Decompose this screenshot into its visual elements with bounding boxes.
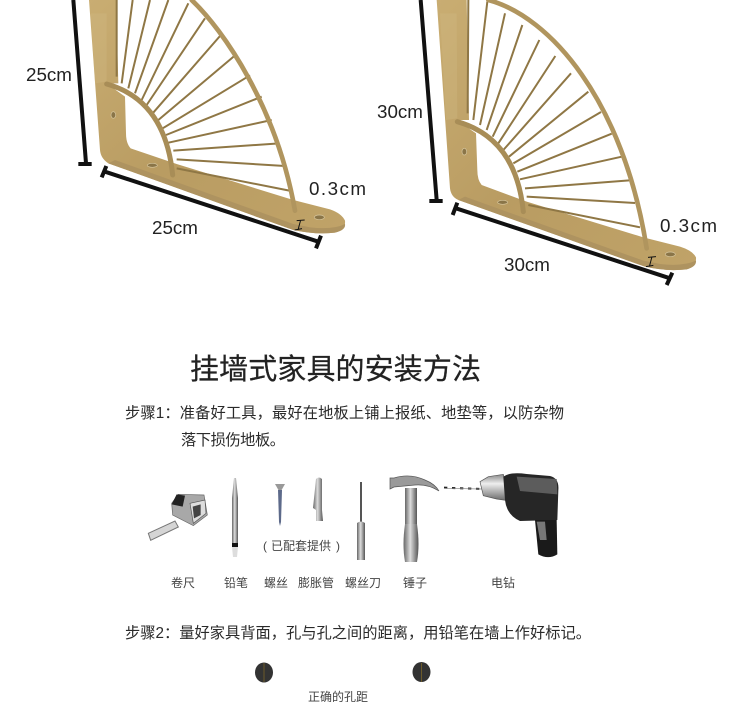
step 2 text: 步骤2：量好家具背面，孔与孔之间的距离，用铅笔在墙上作好标记。: [125, 625, 591, 642]
label: 25cm height: 25cm: [26, 64, 72, 85]
icon: wall anchor: [313, 478, 323, 521]
tool labels: 卷尺: [171, 575, 195, 590]
label: 0.3cm thickness right: 0.3cm: [660, 215, 717, 236]
bracket note: (: [263, 539, 267, 553]
tool labels: [171, 575, 515, 590]
bracket: 30cm: [421, 0, 696, 285]
label: 30cm height: 30cm: [377, 101, 423, 122]
bracket note: ): [336, 539, 340, 553]
mounting holes: [462, 148, 675, 257]
icon: drill: [444, 473, 558, 557]
icon: right wall hole: [412, 662, 430, 682]
tool labels: 铅笔: [224, 575, 248, 590]
tool labels: 螺丝: [264, 576, 288, 590]
label: 0.3cm thickness: 0.3cm: [309, 178, 366, 199]
label: 25cm width: 25cm: [152, 217, 198, 238]
bracket plate: [89, 0, 345, 233]
icon: left wall hole: [255, 662, 273, 682]
dimension lines: [421, 0, 672, 285]
icon: tape measure: [148, 494, 207, 540]
outer arc: [488, 0, 647, 248]
title: 挂墙式家具的安装方法: [190, 353, 481, 386]
spokes: [468, 0, 640, 227]
mounting holes: [111, 112, 324, 220]
icon: pencil: [232, 478, 238, 557]
icon: screw: [275, 484, 285, 526]
tool labels: 电钻: [491, 575, 515, 590]
inner arc: [107, 84, 173, 175]
label: 30cm width: 30cm: [504, 254, 550, 275]
bracket note: 已配套提供: [271, 538, 331, 553]
step 1 text: [125, 404, 564, 449]
tool labels: 膨胀管: [298, 575, 334, 590]
spokes: [117, 0, 289, 191]
inner arc: [457, 122, 523, 212]
step 1 text: 步骤1：准备好工具，最好在地板上铺上报纸、地垫等，以防杂物: [125, 404, 564, 422]
dimension lines: [73, 0, 321, 248]
tool labels: 锤子: [403, 575, 427, 590]
bracket plate: [437, 0, 696, 270]
outer arc: [192, 0, 295, 211]
bracket: 25cm: [73, 0, 345, 248]
step 1 text: 落下损伤地板。: [181, 431, 285, 449]
icon: hammer: [390, 476, 439, 562]
tool labels: 螺丝刀: [345, 576, 381, 590]
icon: screwdriver: [357, 482, 365, 560]
